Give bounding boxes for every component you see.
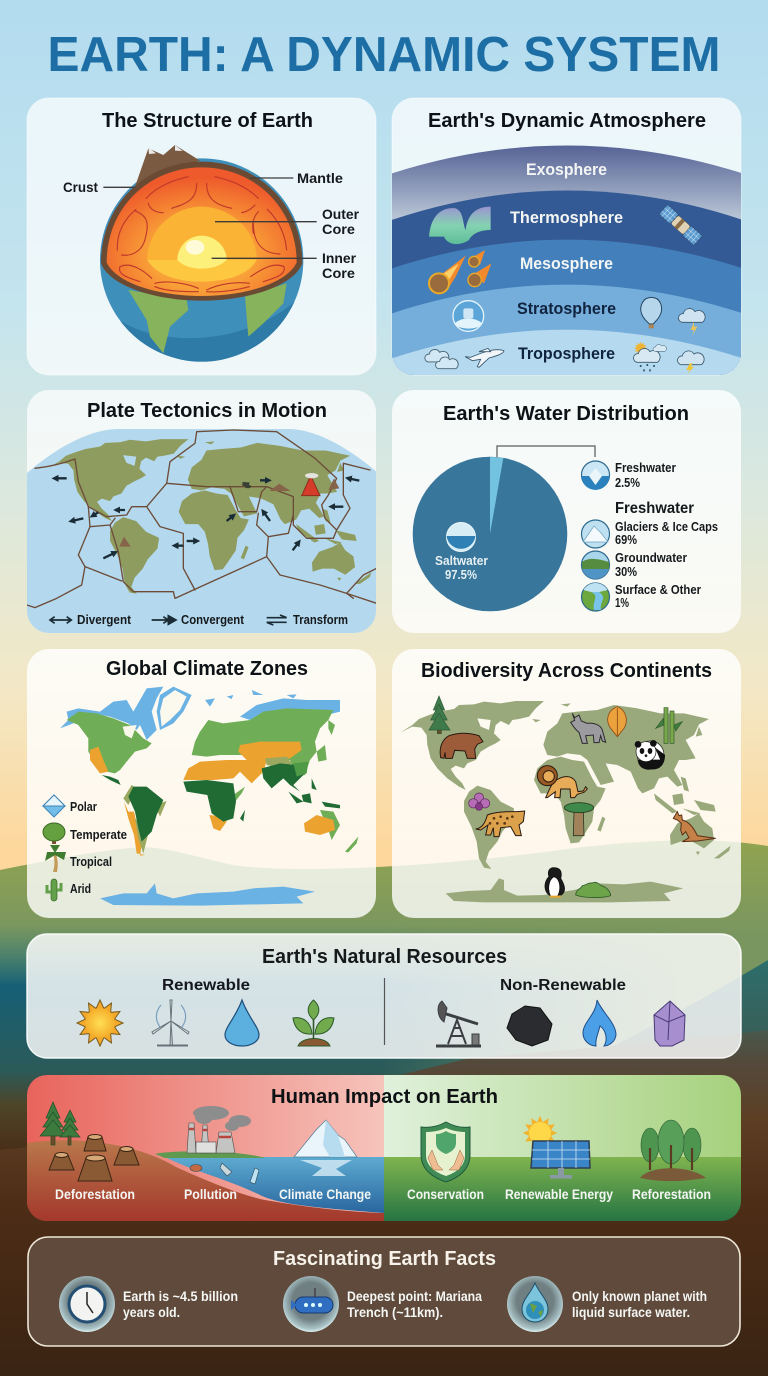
heading: climate: Global Climate Zones xyxy=(106,658,308,680)
icon: kangaroo xyxy=(673,812,716,842)
icon: water drop xyxy=(225,1000,259,1046)
panel: water distribution xyxy=(392,390,741,633)
icon: coal xyxy=(507,1006,552,1046)
icon: aurora xyxy=(429,207,491,244)
value: surface: 1% xyxy=(615,596,629,610)
panel: structure of Earth xyxy=(27,98,376,375)
icon: moss xyxy=(576,882,611,898)
icon: storm cloud xyxy=(678,309,705,336)
icon: airplane xyxy=(465,348,504,367)
label: renewable energy: Renewable Energy xyxy=(505,1186,613,1202)
icon: shield with hands xyxy=(421,1122,470,1182)
heading: atmosphere: Earth's Dynamic Atmosphere xyxy=(428,110,706,132)
legend icon: arid xyxy=(47,879,61,901)
fact: age: Earth is ~4.5 billion xyxy=(123,1288,238,1304)
legend: tropical: Tropical xyxy=(70,855,112,869)
icon: rain and sun xyxy=(633,342,666,371)
icon: autumn leaf xyxy=(608,707,626,737)
subheading: non-renewable: Non-Renewable xyxy=(500,977,626,994)
icon: flame xyxy=(583,1000,616,1046)
label: deforestation: Deforestation xyxy=(55,1186,135,1202)
label: stratosphere: Stratosphere xyxy=(517,299,616,318)
heading: biodiversity: Biodiversity Across Continents xyxy=(421,660,712,682)
icon: factory xyxy=(187,1123,235,1153)
label: exosphere: Exosphere xyxy=(526,160,607,179)
icon: wolf xyxy=(571,713,606,743)
legend: groundwater: Groundwater xyxy=(615,551,687,565)
icon: solar panel and sun xyxy=(523,1116,590,1178)
icon: thunder cloud xyxy=(677,351,704,374)
label: reforestation: Reforestation xyxy=(632,1186,711,1202)
legend symbols xyxy=(50,615,287,625)
icon: bamboo xyxy=(656,708,682,743)
label: pollution: Pollution xyxy=(184,1186,237,1202)
value: glaciers: 69% xyxy=(615,533,637,547)
icon: bear xyxy=(440,733,483,758)
label: troposphere: Troposphere xyxy=(518,344,615,363)
legend: temperate: Temperate xyxy=(70,828,127,842)
label: mantle: Mantle xyxy=(297,170,343,186)
subheading: renewable: Renewable xyxy=(162,977,250,994)
map: continents with wildlife xyxy=(401,696,731,902)
icon: iceberg xyxy=(294,1120,357,1176)
legend: convergent: Convergent xyxy=(181,613,245,627)
legend: divergent: Divergent xyxy=(77,613,132,627)
icon: glacier circle xyxy=(582,520,610,548)
label: crust: Crust xyxy=(63,179,98,195)
heading: human impact: Human Impact on Earth xyxy=(271,1086,498,1108)
label: saltwater: Saltwater xyxy=(435,554,488,568)
fact: age second line: years old. xyxy=(123,1304,180,1320)
icon: submarine bubble xyxy=(283,1276,339,1332)
icon: iceberg circle xyxy=(582,461,610,490)
legend: arid: Arid xyxy=(70,882,91,896)
icon: mountains xyxy=(119,478,339,547)
icon: orchid xyxy=(469,793,490,810)
title: EARTH: A DYNAMIC SYSTEM xyxy=(48,28,720,82)
legend icon: polar xyxy=(43,795,65,817)
legend icon: temperate xyxy=(43,823,65,844)
legend: polar: Polar xyxy=(70,800,97,814)
icon: jaguar xyxy=(476,811,525,837)
fact: liquid water second line: liquid surface water. xyxy=(572,1304,690,1320)
label: inner core: Core xyxy=(322,265,355,281)
subheading: freshwater: Freshwater xyxy=(615,500,694,517)
icon: sea xyxy=(446,522,476,552)
icon: baobab xyxy=(564,803,594,836)
fact: deepest point second line: Trench (~11km). xyxy=(347,1304,443,1320)
icon: surface water circle xyxy=(582,583,610,611)
icon: wind turbine xyxy=(152,1000,189,1046)
legend icon: tropical xyxy=(44,845,66,872)
icon: crystal xyxy=(654,1001,685,1046)
icon: clouds xyxy=(425,350,458,369)
fact: deepest point: Deepest point: Mariana xyxy=(347,1288,482,1304)
panel: atmosphere xyxy=(384,98,751,390)
icon: clock bubble xyxy=(59,1276,115,1332)
panel: earth facts xyxy=(28,1237,740,1346)
icon: balloon xyxy=(641,297,662,328)
icon: ozone badge xyxy=(453,301,484,331)
map: tectonic plates xyxy=(27,429,378,638)
legend: surface: Surface & Other xyxy=(615,583,701,597)
icon: pine trees xyxy=(40,1102,80,1145)
chart: pie of saltwater and freshwater xyxy=(413,446,595,611)
icon: volcano xyxy=(302,473,320,496)
icon: groundwater circle xyxy=(582,551,610,579)
label: outer: Outer xyxy=(322,206,360,222)
value: groundwater: 30% xyxy=(615,565,637,579)
legend: transform: Transform xyxy=(293,613,348,627)
heading: structure: The Structure of Earth xyxy=(102,110,313,132)
fact: liquid water: Only known planet with xyxy=(572,1288,707,1304)
panel: climate zones xyxy=(27,649,376,918)
icon: plate arrows xyxy=(55,478,359,558)
value: saltwater percent: 97.5% xyxy=(445,568,477,582)
icon: satellite xyxy=(659,205,702,245)
heading: plate tectonics: Plate Tectonics in Motion xyxy=(87,400,327,422)
heading: facts: Fascinating Earth Facts xyxy=(273,1248,496,1270)
panel: plate tectonics xyxy=(27,390,378,638)
diagram: Earth cross-section xyxy=(100,145,317,367)
icon: young trees xyxy=(640,1120,706,1181)
panel: biodiversity xyxy=(392,649,741,918)
icon: panda xyxy=(635,740,665,769)
icon: meteors xyxy=(429,250,491,293)
panel: natural resources xyxy=(27,934,741,1058)
label: conservation: Conservation xyxy=(407,1186,484,1202)
map: climate zones xyxy=(60,687,358,906)
icon: pine tree xyxy=(429,696,450,734)
icon: water drop planet bubble xyxy=(507,1276,563,1332)
label: climate change: Climate Change xyxy=(279,1186,371,1202)
icon: oil pump xyxy=(436,1001,481,1046)
chart: atmosphere layers xyxy=(392,146,741,375)
icon: lion xyxy=(537,766,587,798)
label: mesosphere: Mesosphere xyxy=(520,254,613,273)
panel: human impact xyxy=(27,1075,741,1221)
icon: pollution debris xyxy=(190,1163,259,1184)
label: outer core: Core xyxy=(322,221,355,237)
icon: smoke xyxy=(193,1106,251,1131)
legend: freshwater: Freshwater xyxy=(615,461,676,475)
heading: resources: Earth's Natural Resources xyxy=(262,946,507,968)
icon: sun xyxy=(77,1000,123,1046)
icon: sprout xyxy=(293,1000,334,1046)
label: thermosphere: Thermosphere xyxy=(510,208,623,227)
icon: penguin xyxy=(545,868,565,897)
legend: glaciers: Glaciers & Ice Caps xyxy=(615,520,718,534)
label: inner: Inner xyxy=(322,250,357,266)
value: freshwater: 2.5% xyxy=(615,476,640,490)
icon: stumps xyxy=(49,1134,139,1181)
heading: water: Earth's Water Distribution xyxy=(443,403,689,425)
